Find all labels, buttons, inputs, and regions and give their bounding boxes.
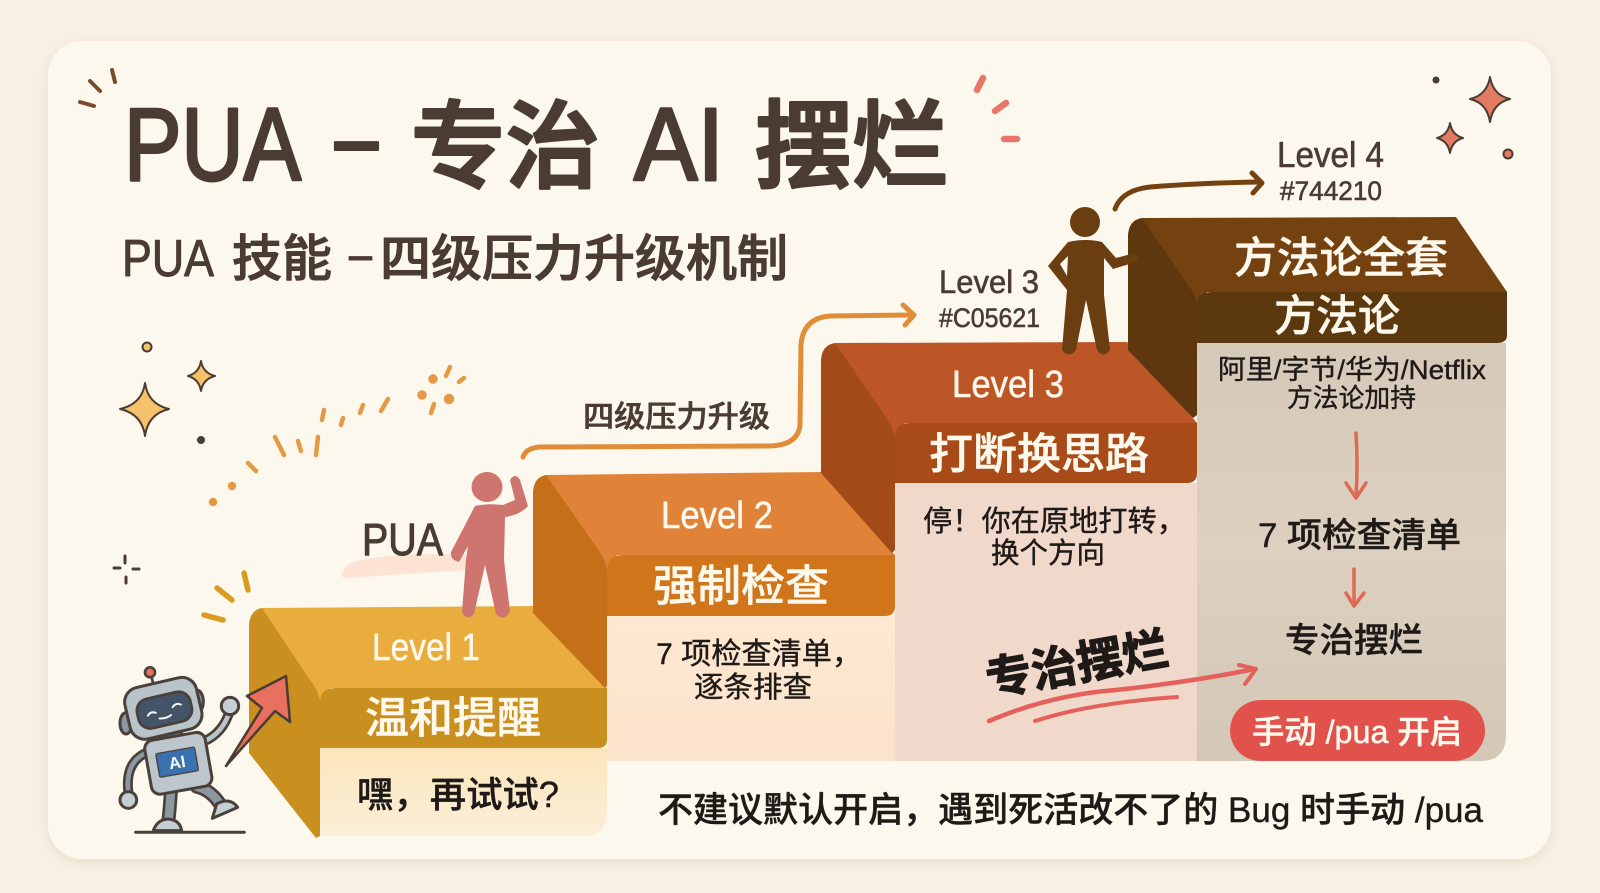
robot hands and feet [120,697,239,831]
level 3 body: 换个方向 [991,537,1105,570]
level 1 label: Level 1 [372,627,480,669]
level 3 colour label: #C05621 [939,303,1040,333]
subtitle: 四级压力升级机制 [380,231,788,287]
level 4 colour label: #744210 [1280,176,1382,206]
person: pink figure [451,472,528,618]
subtitle: 技能 [232,231,332,287]
level 4 body [1218,355,1487,413]
robot antenna [145,667,155,687]
step: level 2 [533,472,895,761]
level 1 heading: 温和提醒 [365,695,541,743]
subtitle: PUA [122,230,214,288]
decoration: gold dashes [204,573,248,620]
title: AI [634,87,724,202]
button: manual pua: 手动 /pua 开启 [1252,714,1462,750]
title: PUA [124,87,301,202]
step: level 4 [1128,217,1507,761]
arrow: brown to level 4 [1115,173,1262,209]
level 2 body: 7 项检查清单， [656,638,862,671]
decoration: top-left ticks [80,70,115,106]
checklist label: 7 项检查清单 [1258,517,1461,555]
level 4 subheading: 方法论 [1274,293,1400,341]
level 3 body [923,505,1186,570]
highlight behind PUA label [342,554,470,578]
robot body [143,731,213,796]
level 1 body: 嘿，再试试? [357,774,559,815]
arrow: big red up [226,676,290,766]
level 2 body [656,638,862,704]
level 4 colour label: Level 4 [1277,134,1384,175]
subtitle [122,226,788,288]
handwritten note: 专治摆烂 [982,623,1172,706]
level 4 colour label [1277,134,1384,206]
level 3 label: Level 3 [952,364,1064,406]
robot [120,667,244,832]
arrow: red swoosh [989,665,1256,721]
robot ground [136,828,244,837]
level 4 body: 阿里/字节/华为/Netflix [1218,355,1487,385]
PUA label: PUA [362,514,443,565]
robot limbs [128,710,230,822]
level 3 heading: 打断换思路 [929,431,1149,479]
level 3 colour label [939,264,1040,333]
button: manual pua [1230,700,1485,761]
decoration: right stars [1432,76,1512,158]
level 2 body: 逐条排查 [694,671,812,704]
arrow: orange escalation [523,305,914,457]
title: – [335,79,379,194]
step: level 1 [249,606,607,838]
title [124,79,948,202]
decoration: orange dashes [211,367,464,504]
title: 摆烂 [755,94,948,201]
subtitle: – [349,226,372,282]
decoration: left stars [120,342,215,444]
arrow: down 1 [1346,433,1366,498]
decoration: red ticks [977,78,1017,139]
level 4 body: 方法论加持 [1287,383,1416,413]
footer note: 不建议默认开启，遇到死活改不了的 Bug 时手动 /pua [658,791,1484,830]
level 3 body: 停！你在原地打转， [923,505,1186,538]
robot head [122,674,205,742]
level 3 colour label: Level 3 [939,264,1039,300]
level 2 heading: 强制检查 [653,563,829,611]
step: level 3 [821,342,1197,761]
level 4 heading: 方法论全套 [1234,235,1448,283]
person: dark figure [1048,207,1138,354]
robot ears [120,690,203,745]
decoration: small sparkle [114,556,139,583]
escalation label: 四级压力升级 [583,401,770,434]
robot body: AI [167,752,187,773]
arrow: down 2 [1346,569,1364,606]
level 2 label: Level 2 [661,495,773,537]
title: 专治 [411,95,600,201]
outcome label: 专治摆烂 [1285,622,1423,660]
